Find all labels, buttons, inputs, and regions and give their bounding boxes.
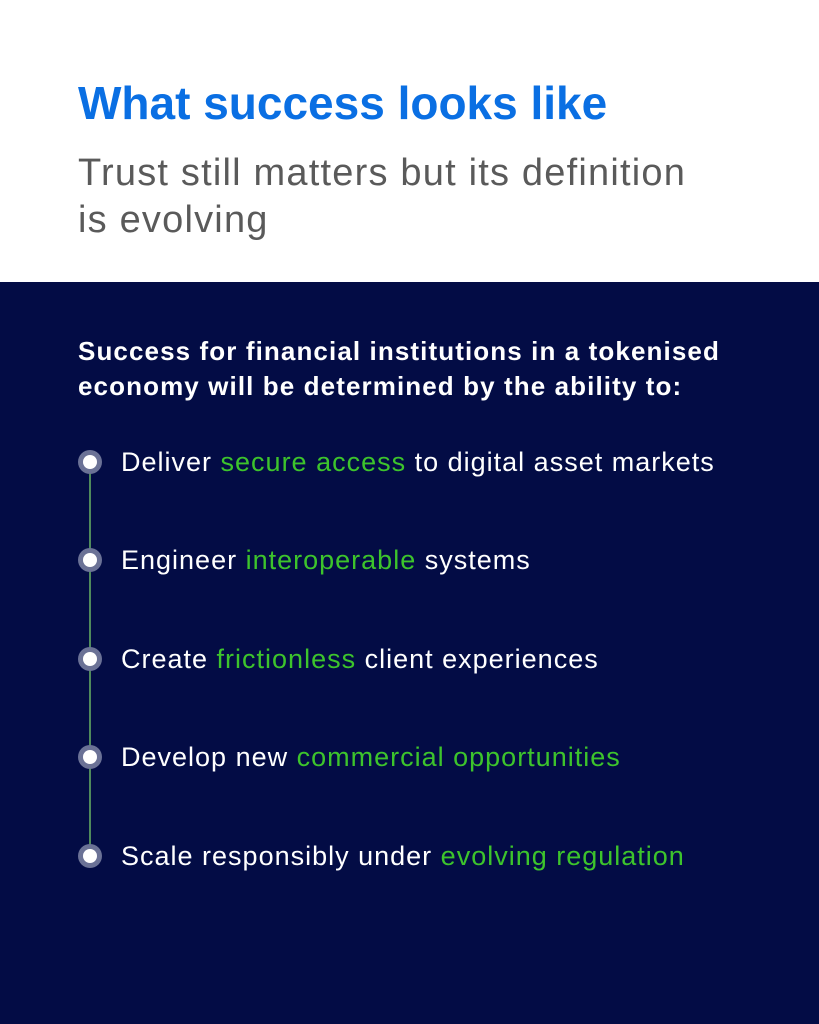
text: Develop new commercial opportunities — [121, 742, 621, 772]
text: Create frictionless client experiences — [121, 644, 599, 674]
text: Scale responsibly under evolving regulation — [121, 841, 685, 871]
text: Engineer interoperable systems — [121, 545, 531, 575]
intro text: Success for financial institutions in a tokenised — [78, 336, 720, 366]
item 4 — [78, 742, 621, 772]
intro text — [78, 336, 720, 401]
item 3 — [78, 644, 599, 674]
intro text: economy will be determined by the ability to: — [78, 371, 682, 401]
subtitle: Trust still matters but its definition — [78, 152, 686, 194]
item 5 — [78, 841, 685, 871]
subtitle: is evolving — [78, 199, 269, 241]
item 2 — [78, 545, 531, 575]
timeline line — [89, 462, 91, 856]
text: Deliver secure access to digital asset markets — [121, 447, 715, 477]
item 1 — [78, 447, 715, 477]
title: What success looks like — [78, 77, 607, 129]
subtitle — [78, 152, 686, 241]
panel: dark — [0, 282, 819, 1024]
